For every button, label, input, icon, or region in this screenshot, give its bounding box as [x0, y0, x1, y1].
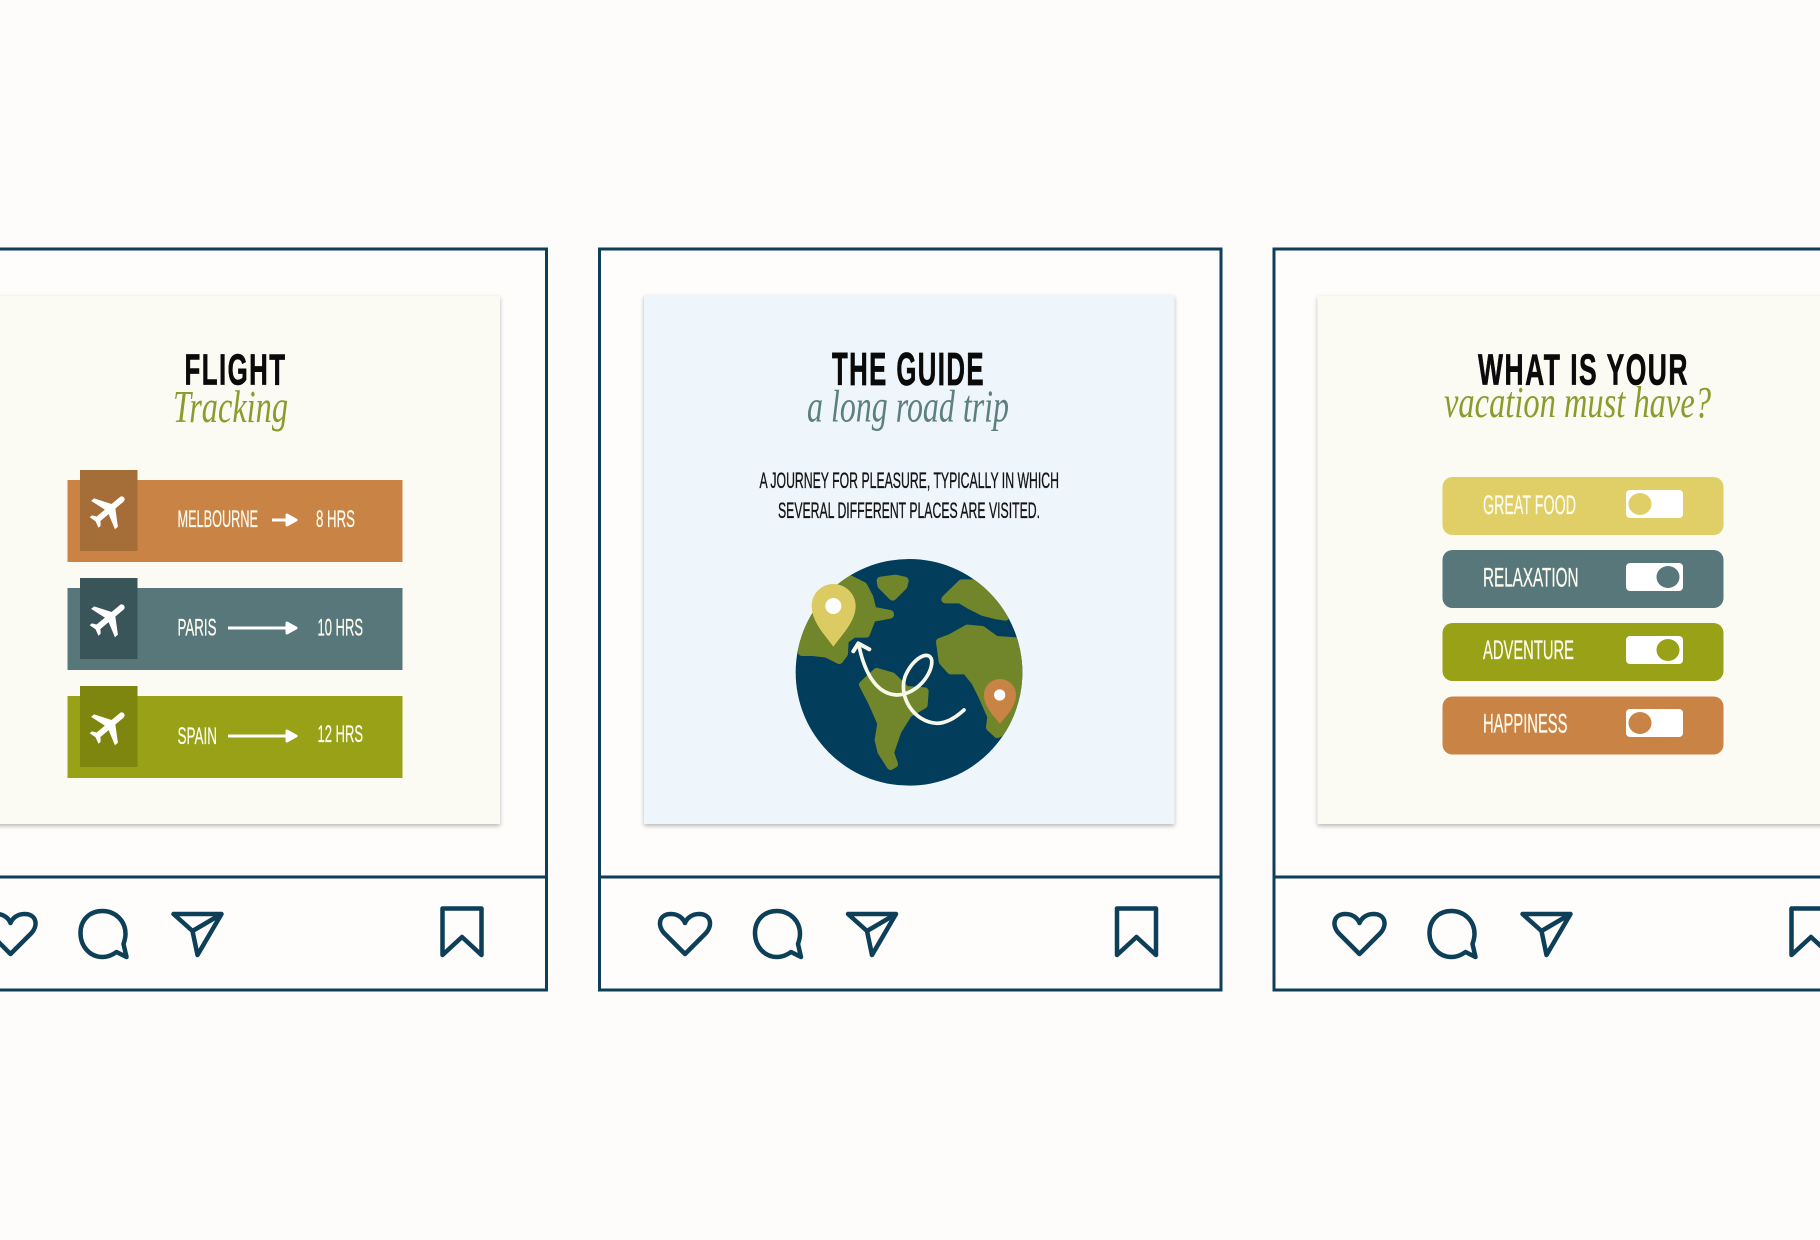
- heading: the guide: THE GUIDE: [832, 343, 985, 395]
- option: relaxation: [1442, 550, 1724, 608]
- route line: [859, 647, 964, 723]
- card centre: [644, 295, 1174, 824]
- card left: [0, 296, 500, 824]
- row: spain: [68, 686, 402, 778]
- option: happiness: [1442, 696, 1724, 754]
- icon: plane: [82, 591, 136, 645]
- row: paris: [68, 578, 402, 670]
- action icons right: [1274, 877, 1820, 957]
- icon: plane: [82, 699, 136, 753]
- arrow: [272, 515, 296, 525]
- option: adventure: ADVENTURE: [1483, 635, 1574, 665]
- row: paris: 10 HRS: [318, 614, 363, 642]
- description text: SEVERAL DIFFERENT PLACES ARE VISITED.: [778, 498, 1040, 523]
- icon: plane: [82, 483, 136, 537]
- action icons centre: [599, 877, 1222, 957]
- post frame right: [1274, 249, 1820, 990]
- row: paris: PARIS: [178, 614, 216, 642]
- row: melbourne: MELBOURNE: [178, 506, 258, 533]
- panel: vacation must have post: [1274, 249, 1820, 990]
- toggle on: [1626, 563, 1683, 591]
- script heading: tracking: Tracking: [173, 381, 288, 432]
- panel: flight tracking post: [0, 249, 548, 990]
- script heading: vacation must have: vacation must have?: [1444, 378, 1711, 427]
- row: melbourne: [68, 470, 402, 562]
- pin: orange: [984, 679, 1016, 724]
- arrow: [228, 623, 296, 633]
- description text: [760, 468, 1059, 523]
- row: spain: SPAIN: [178, 723, 217, 750]
- post frame centre: [600, 249, 1221, 990]
- description text: A JOURNEY FOR PLEASURE, TYPICALLY IN WHICH: [760, 468, 1059, 493]
- toggle off: [1626, 490, 1683, 518]
- card right: [1318, 296, 1820, 824]
- row: melbourne: 8 HRS: [316, 506, 355, 533]
- option: adventure: [1442, 623, 1724, 681]
- option: relaxation: RELAXATION: [1483, 562, 1578, 592]
- toggle off: [1626, 709, 1683, 737]
- toggle on: [1626, 636, 1683, 664]
- option: great food: GREAT FOOD: [1483, 490, 1576, 520]
- post frame left: [0, 249, 546, 990]
- script heading: a long road trip: a long road trip: [807, 380, 1009, 432]
- option: great food: [1442, 477, 1724, 535]
- globe illustration: [796, 559, 1027, 786]
- panel: the guide post: [599, 249, 1222, 990]
- heading: what is your: WHAT IS YOUR: [1478, 346, 1689, 394]
- pin: yellow: [812, 584, 856, 647]
- divider and action icons left: [0, 877, 548, 957]
- heading: flight: FLIGHT: [184, 346, 286, 394]
- option: happiness: HAPPINESS: [1483, 708, 1568, 738]
- row: spain: 12 HRS: [318, 721, 363, 748]
- arrow: [228, 731, 296, 741]
